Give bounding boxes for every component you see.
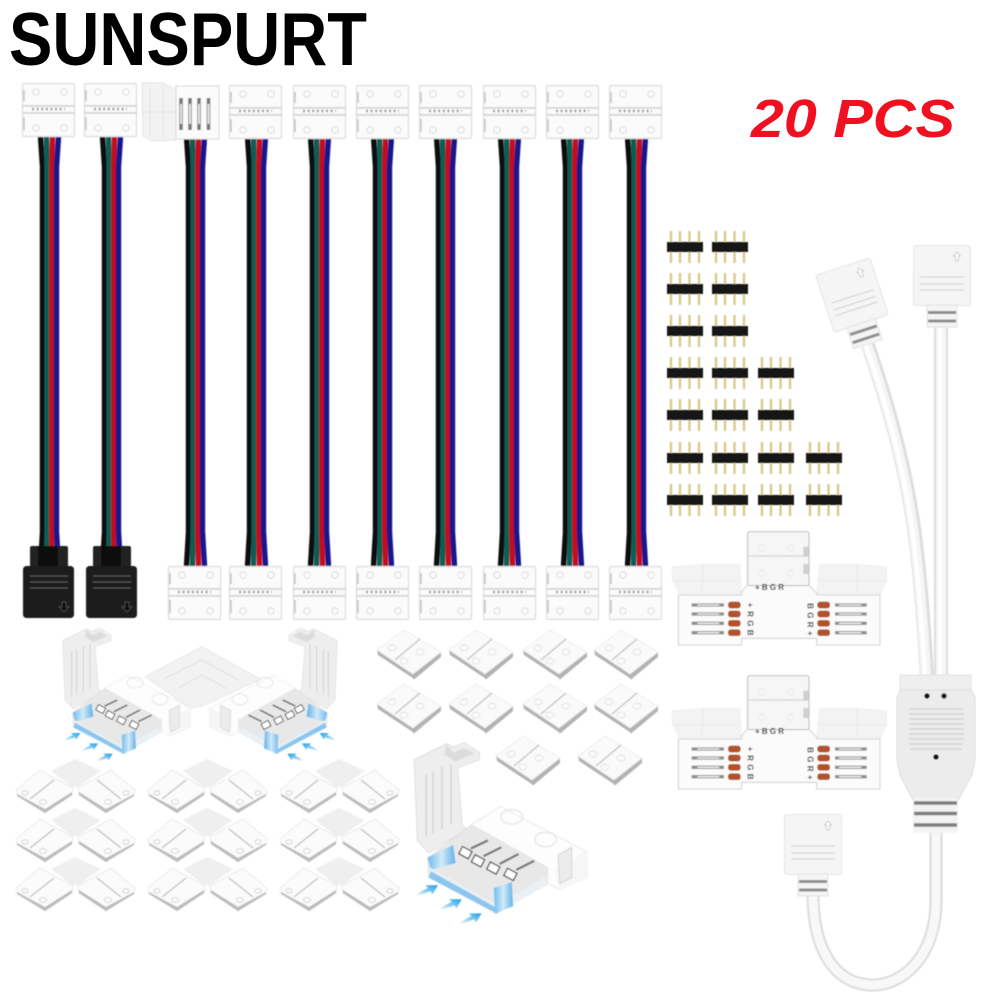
pin labels lower: + B G R [755,727,784,736]
pin labels lower: + [745,747,754,752]
pin labels lower: R [805,766,814,772]
pin labels upper: G [745,620,754,626]
panel: small straight clips [377,630,658,786]
pin labels upper [745,583,814,636]
pin labels lower: G [745,764,754,770]
lower socket [784,814,842,896]
pin labels lower: G [805,756,814,762]
panel: T connectors [672,532,887,789]
splitter hub [897,675,975,833]
pin labels upper: + B G R [755,583,784,592]
pin labels upper: + [805,631,814,636]
T connector upper [672,532,887,645]
black plug connectors [23,546,137,618]
pin labels upper: B [745,630,754,636]
bottom strip clips [168,566,662,620]
top strip clips [22,84,662,138]
pin labels upper: R [805,622,814,628]
panel: large open straight connector [414,743,587,923]
angled socket [816,258,895,353]
wires: ten four-colour cables [40,137,646,566]
pin labels lower: R [745,755,754,761]
panel: large open L connector [63,628,337,761]
panel: header pins [667,231,842,516]
open strip clip with contacts [142,83,219,141]
pin labels upper: G [805,612,814,618]
pin labels lower: B [805,747,814,753]
panel: small L clips [16,759,399,911]
pin labels lower [745,727,814,780]
panel: RGB jumper wires [22,83,662,620]
splitter cables [813,326,941,985]
T connector lower [672,676,887,789]
straight socket [914,246,970,327]
pin labels lower: B [745,774,754,780]
heading: piece count: 20 PCS [750,89,955,149]
pin labels lower: + [805,775,814,780]
panel: white Y splitter cable [784,246,975,985]
pin labels upper: R [745,611,754,617]
pin labels upper: B [805,603,814,609]
pin labels upper: + [745,603,754,608]
